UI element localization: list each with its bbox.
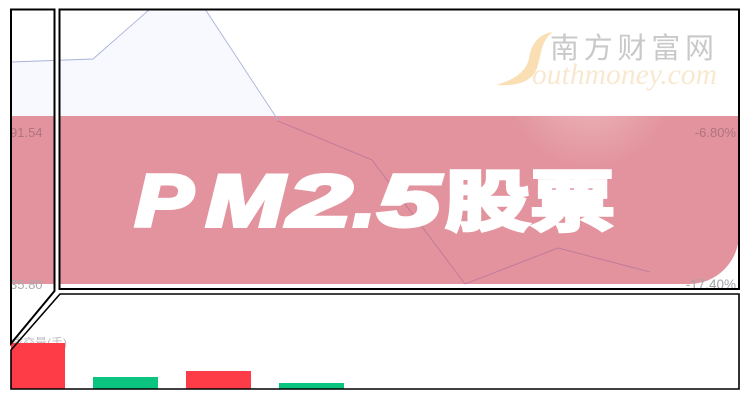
line chart: price	[11, 9, 650, 284]
title	[135, 161, 615, 242]
title dot: .	[353, 161, 375, 242]
gap between frames	[55, 0, 59, 290]
axis label: top left: 91.54	[10, 125, 43, 140]
line above banner	[11, 9, 278, 120]
volume axis label: 成交量(手)	[11, 335, 67, 350]
watermark chinese name: 南方财富网	[550, 32, 714, 65]
axis label: bottom left: 35.80	[10, 277, 43, 292]
bar 2	[93, 377, 158, 389]
frame: left column	[11, 10, 54, 344]
frame: main chart	[60, 10, 739, 289]
line over banner	[278, 121, 650, 284]
axis label: top right: -6.80%	[695, 125, 736, 140]
icon: orange swoosh	[496, 32, 553, 85]
pink title banner	[11, 116, 739, 284]
bar 4	[279, 383, 344, 389]
bar 3	[186, 371, 251, 389]
title letter P: P	[135, 161, 193, 242]
bar 1	[11, 343, 65, 389]
axis label: bottom right: -17.40%	[686, 277, 736, 292]
chart area fill	[11, 9, 465, 284]
watermark logo	[496, 32, 717, 91]
title letter M: M	[206, 161, 287, 242]
volume bar chart	[11, 343, 344, 389]
frame: volume panel	[11, 294, 739, 389]
title chinese part: 股票	[445, 165, 615, 239]
title digit 2: 2	[285, 161, 352, 242]
watermark url: outhmoney.com	[532, 58, 717, 91]
title digit 5: 5	[378, 161, 442, 242]
